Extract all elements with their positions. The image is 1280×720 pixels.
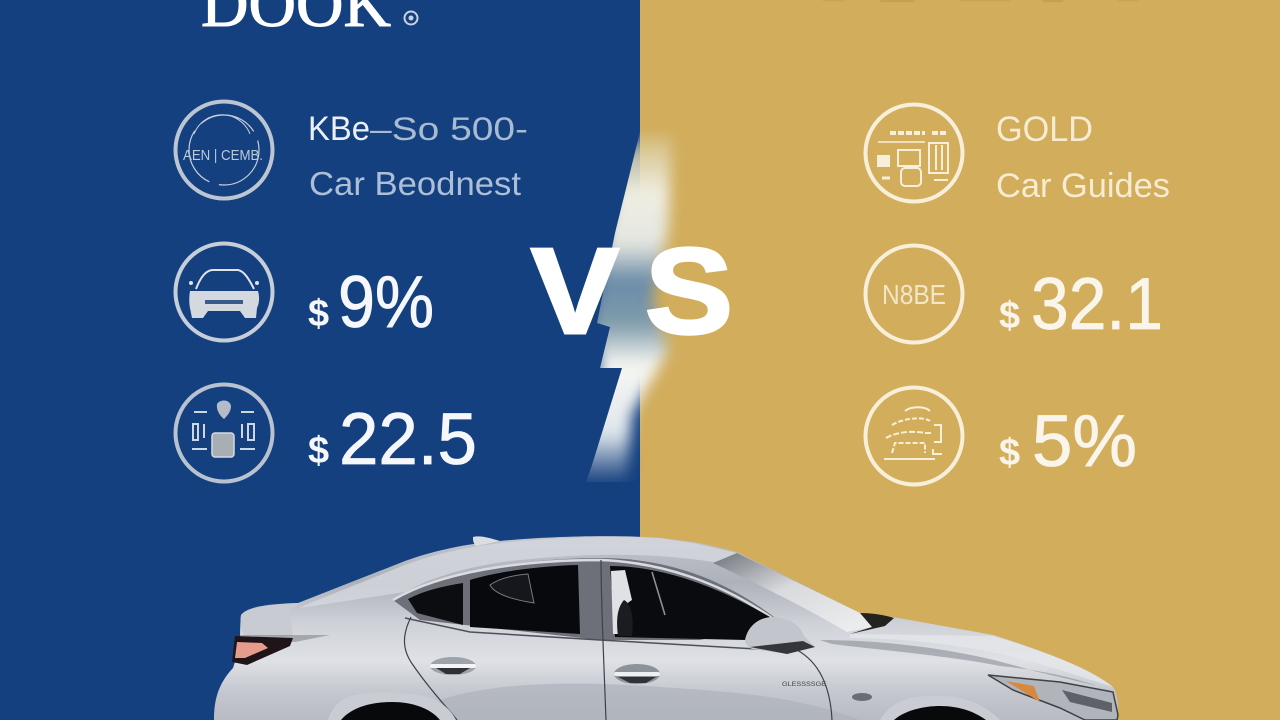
windshield (713, 553, 872, 632)
side mirror (745, 617, 815, 654)
icon: badge NBBE (866, 246, 962, 342)
icon: car front (176, 244, 272, 340)
car body (214, 536, 1118, 720)
front door handle (614, 664, 660, 684)
window trim (393, 560, 772, 618)
text: VS: V (531, 223, 619, 359)
text: right heading: Car Guides (996, 167, 1170, 205)
divider: lightning bolt (586, 130, 680, 482)
model badge: GLESSSSGE (782, 682, 826, 688)
antenna fin (473, 536, 500, 546)
rear door glass (470, 565, 580, 634)
tail light (232, 636, 293, 665)
rear door handle (430, 657, 476, 675)
icon: car parts (176, 384, 272, 482)
text: left heading: –So 500- (370, 111, 528, 147)
text: VS: S (645, 223, 733, 359)
spoiler (240, 603, 300, 636)
value: left 22.5: 22.5 (339, 399, 477, 480)
value: left 9 percent: 9% (338, 262, 434, 343)
text: left heading: KBe (308, 110, 370, 148)
roof highlight (300, 537, 737, 608)
value: right 5 percent: $ (999, 432, 1020, 474)
panel: gold background (640, 0, 1280, 720)
text: left heading: Car Beodnest (309, 165, 521, 202)
icon: badge seal: AEN | CEMB. (183, 147, 263, 164)
text: VS (531, 223, 733, 359)
value: left 9 percent: $ (308, 293, 329, 335)
value: right 32.1: $ (999, 295, 1020, 337)
front wheel arch (880, 696, 1000, 720)
panel: blue background (0, 0, 640, 720)
value: right 5 percent: 5% (1032, 401, 1137, 482)
trunk shadow (240, 635, 330, 642)
headlight (988, 675, 1118, 720)
icon: badge NBBE: N8BE (882, 279, 946, 310)
car: silver sedan (214, 536, 1118, 720)
icon: document parts (866, 388, 962, 484)
fender emblem (852, 693, 872, 701)
icon: gold guide (866, 104, 962, 202)
side lower shade (430, 684, 860, 720)
icon: badge seal (176, 102, 272, 198)
rear wheel arch (328, 693, 456, 720)
rear quarter glass (408, 583, 463, 625)
value: right 32.1: 32.1 (1031, 264, 1163, 345)
door seams (404, 560, 832, 720)
text: left heading (308, 110, 528, 202)
cowl (850, 613, 894, 634)
value: left 22.5: $ (308, 430, 329, 472)
front door glass (610, 566, 770, 640)
text: right heading (996, 110, 1170, 205)
window frame (393, 558, 778, 640)
belt line (405, 618, 775, 650)
text: right heading: GOLD (996, 110, 1093, 149)
right title remnants (823, 0, 1138, 2)
hood shade (820, 640, 1113, 692)
